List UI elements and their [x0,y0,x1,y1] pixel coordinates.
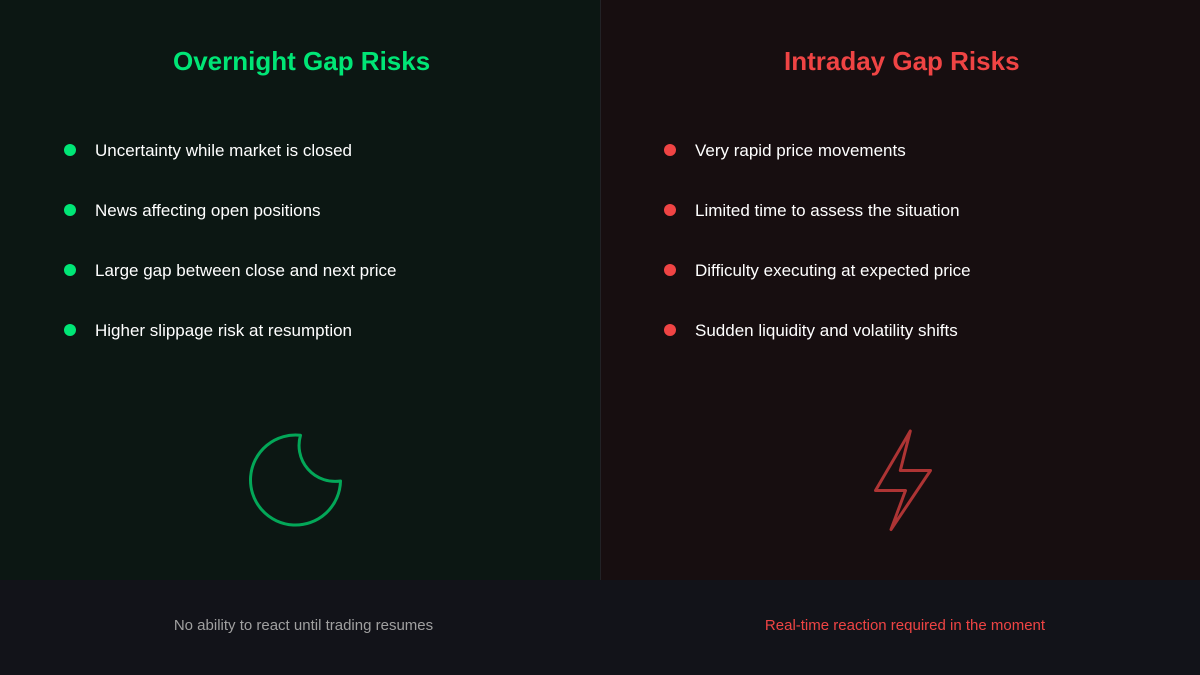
bullet: uncertainty: Uncertainty while market is closed [95,141,352,160]
bullet: large gap: Large gap between close and next price [95,261,396,280]
note: intraday: Real-time reaction required in the moment [765,617,1045,634]
bullet: slippage: Higher slippage risk at resumption [95,321,352,340]
icon: moon [249,434,342,526]
bullet: liquidity: Sudden liquidity and volatility shifts [695,321,958,340]
bullet: news: News affecting open positions [95,201,321,220]
bullet: rapid price: Very rapid price movements [695,141,906,160]
note: overnight: No ability to react until trading resumes [174,617,433,634]
panel: intraday gap risks [600,0,1200,580]
heading: intraday: Intraday Gap Risks [784,46,1020,76]
panel: overnight gap risks [0,0,600,580]
footer bar [0,580,1200,675]
bullet: execution: Difficulty executing at expected price [695,261,971,280]
icon: lightning bolt [874,429,932,532]
bullet: limited time: Limited time to assess the situation [695,201,960,220]
heading: overnight: Overnight Gap Risks [173,46,430,76]
